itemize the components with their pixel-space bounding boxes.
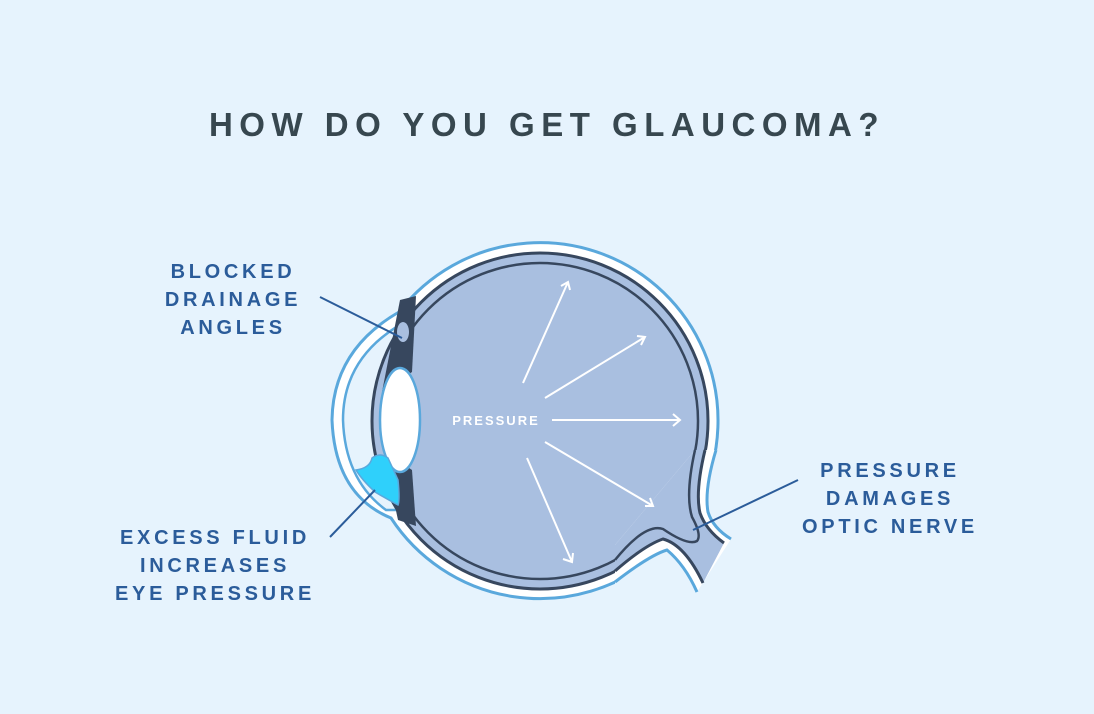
label: optic nerve: PRESSURE xyxy=(820,460,960,482)
pressure text: PRESSURE xyxy=(452,413,540,428)
label: blocked drainage angles: ANGLES xyxy=(180,317,286,339)
label: excess fluid: EXCESS FLUID xyxy=(120,527,310,549)
cornea inner region xyxy=(343,326,398,510)
label: blocked drainage angles: DRAINAGE xyxy=(165,289,301,311)
label: excess fluid: INCREASES xyxy=(140,555,290,577)
iris dark xyxy=(382,296,416,392)
label: optic nerve: OPTIC NERVE xyxy=(802,516,978,538)
label: optic nerve xyxy=(802,460,978,538)
excess fluid xyxy=(356,455,399,505)
lens xyxy=(380,368,420,472)
label: blocked drainage angles xyxy=(165,261,301,339)
label: excess fluid: EYE PRESSURE xyxy=(115,583,315,605)
pointer lines xyxy=(320,297,798,537)
drainage angle xyxy=(397,322,409,342)
pressure arrows xyxy=(523,282,680,562)
optic nerve xyxy=(615,450,780,640)
label: optic nerve: DAMAGES xyxy=(826,488,954,510)
label: blocked drainage angles: BLOCKED xyxy=(171,261,295,283)
eye outer shape (globe + cornea) xyxy=(332,243,718,599)
title: HOW DO YOU GET GLAUCOMA? xyxy=(209,106,885,143)
label: excess fluid xyxy=(115,527,315,605)
globe xyxy=(372,253,708,589)
